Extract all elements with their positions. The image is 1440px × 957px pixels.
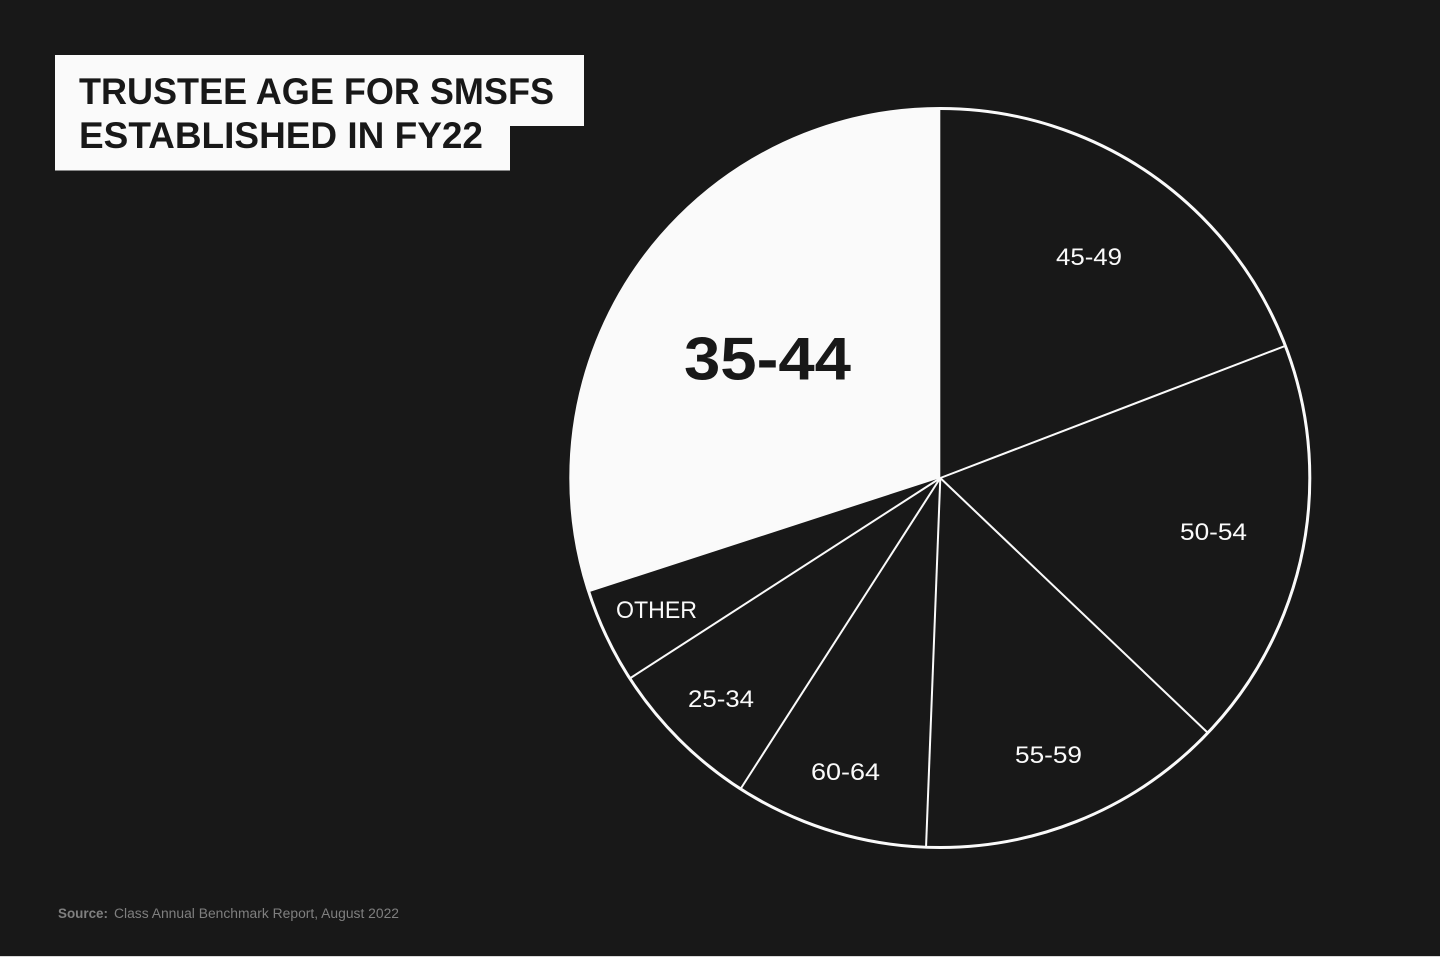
title line 2: ESTABLISHED IN FY22 [79,115,483,156]
slice dividers [630,346,1285,848]
source note [58,906,399,921]
source text: Class Annual Benchmark Report, August 2022 [114,906,399,921]
label: 45-49: 45-49 [1056,244,1122,271]
pie chart [571,108,1310,848]
label: 55-59: 55-59 [1015,742,1082,769]
title [55,55,584,170]
label: OTHER: OTHER [616,597,697,624]
title line 1: TRUSTEE AGE FOR SMSFS [79,71,554,112]
label: 50-54: 50-54 [1180,519,1247,546]
label: 35-44: 35-44 [684,326,852,392]
slice: 35-44 highlighted [571,108,940,592]
label: 60-64: 60-64 [811,759,880,786]
label: 25-34: 25-34 [688,686,754,713]
pie outline [571,108,1310,848]
title background [55,55,584,170]
source label: Source: [58,906,108,921]
